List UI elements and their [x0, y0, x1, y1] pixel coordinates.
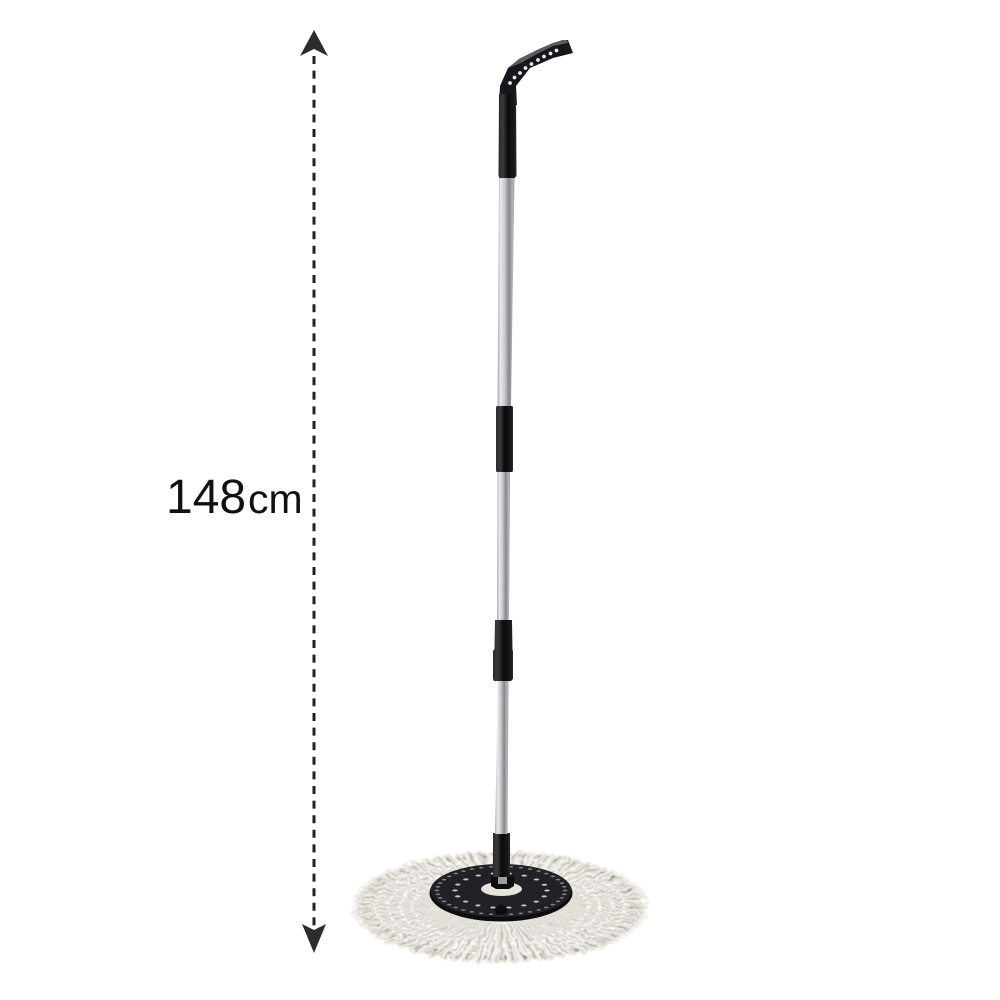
- arrowhead: bottom: [302, 924, 326, 953]
- disc centre slot: [481, 882, 522, 896]
- collar: upper: [496, 406, 513, 472]
- height label: cm: [248, 476, 303, 522]
- pole: lower section: [495, 680, 508, 834]
- collar: lower: [493, 620, 513, 681]
- disc front clip: [494, 904, 508, 915]
- dashed line: [312, 56, 316, 926]
- grip: [498, 94, 516, 178]
- height label: 148: [166, 471, 246, 524]
- handle holes: [508, 49, 558, 85]
- arrowhead: top: [300, 30, 328, 56]
- mop product illustration: [356, 40, 644, 962]
- pole: middle section: [497, 472, 510, 621]
- mop head: cotton fringe: [356, 852, 644, 962]
- mop disc: [430, 864, 572, 922]
- lower pole socket: [493, 833, 510, 877]
- pole: upper section: [498, 176, 514, 407]
- height dimension arrow: [300, 30, 328, 953]
- handle head: [499, 40, 573, 105]
